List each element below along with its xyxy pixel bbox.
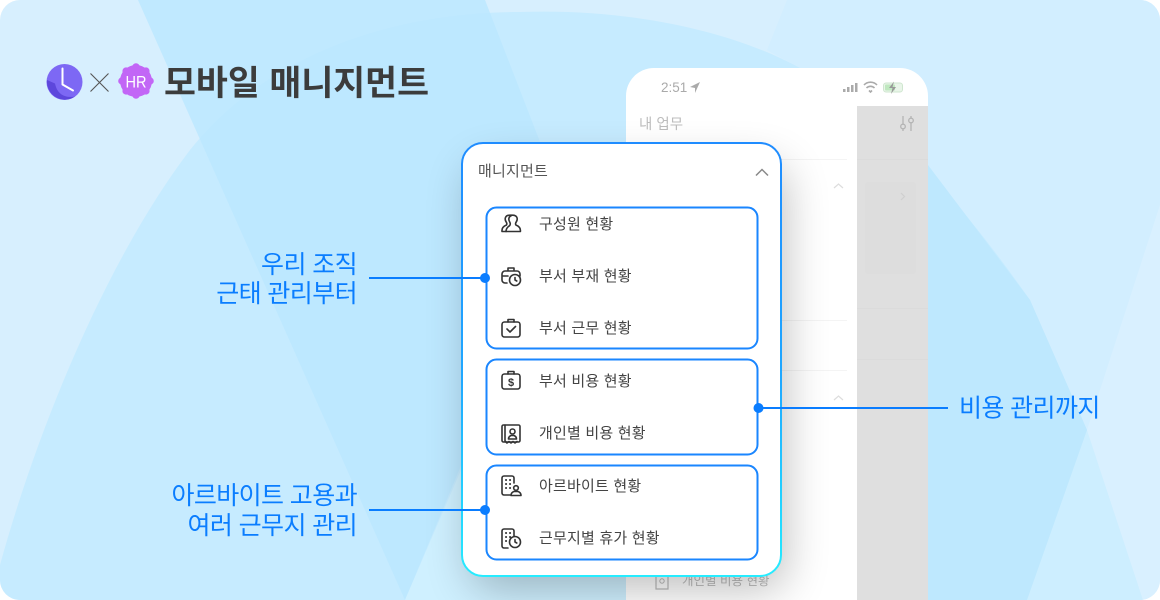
group: attendance: 부서 근무 현황 — [539, 320, 632, 337]
callout: part-time: 여러 근무지 관리 — [188, 512, 357, 540]
callout: attendance: 근태 관리부터 — [216, 280, 357, 308]
icon: briefcase check — [502, 320, 520, 337]
filter icon — [901, 116, 913, 131]
wifi icon — [864, 82, 877, 92]
location arrow — [690, 82, 700, 93]
group: attendance: 구성원 현황 — [539, 216, 613, 233]
callout: part-time — [171, 482, 358, 540]
side panel — [857, 106, 928, 600]
signal icon — [843, 83, 858, 92]
group: expenses — [486, 360, 758, 454]
faint list rows — [639, 160, 847, 370]
faint chevrons — [834, 184, 843, 400]
group: part-time: 근무지별 휴가 현황 — [539, 530, 660, 547]
group: part-time: 아르바이트 현황 — [539, 478, 641, 495]
icon: building person — [502, 476, 521, 496]
icon: building clock — [502, 529, 520, 548]
logo: clock — [46, 64, 82, 100]
icon: receipt person — [502, 425, 520, 443]
callout: part-time: 아르바이트 고용과 — [171, 482, 358, 510]
title: 모바일 매니지먼트 — [164, 65, 429, 103]
group: part-time — [486, 466, 758, 560]
collapse chevron — [756, 170, 768, 176]
faint row: personal expense: 개인별 비용 현황 — [682, 574, 770, 588]
group: expenses: 부서 비용 현황 — [539, 373, 632, 390]
management card — [462, 143, 781, 576]
phone heading: 내 업무 — [639, 116, 683, 133]
connector: attendance — [369, 273, 490, 283]
logo: multiply sign — [90, 74, 108, 92]
group: expenses: $ — [508, 377, 514, 389]
status bar time: 2:51 — [661, 80, 687, 95]
battery icon — [884, 82, 902, 94]
icon: briefcase clock — [502, 268, 520, 286]
group: expenses: 개인별 비용 현황 — [539, 425, 646, 442]
card shadow — [470, 165, 785, 590]
callout: attendance — [216, 251, 357, 308]
icon: people — [502, 215, 520, 232]
logo: HR gear: HR — [126, 72, 146, 92]
side panel content — [900, 193, 905, 200]
logo: HR gear — [118, 63, 154, 99]
connector: part-time — [369, 505, 490, 515]
callout: expense: 비용 관리까지 — [959, 394, 1100, 422]
group: attendance: 부서 부재 현황 — [539, 268, 632, 285]
card heading: 매니지먼트 — [478, 163, 548, 180]
connector: expense — [754, 403, 948, 413]
phone mockup — [626, 68, 928, 600]
callout: attendance: 우리 조직 — [261, 251, 357, 279]
group: attendance — [486, 208, 758, 348]
icon: briefcase dollar — [502, 372, 520, 389]
